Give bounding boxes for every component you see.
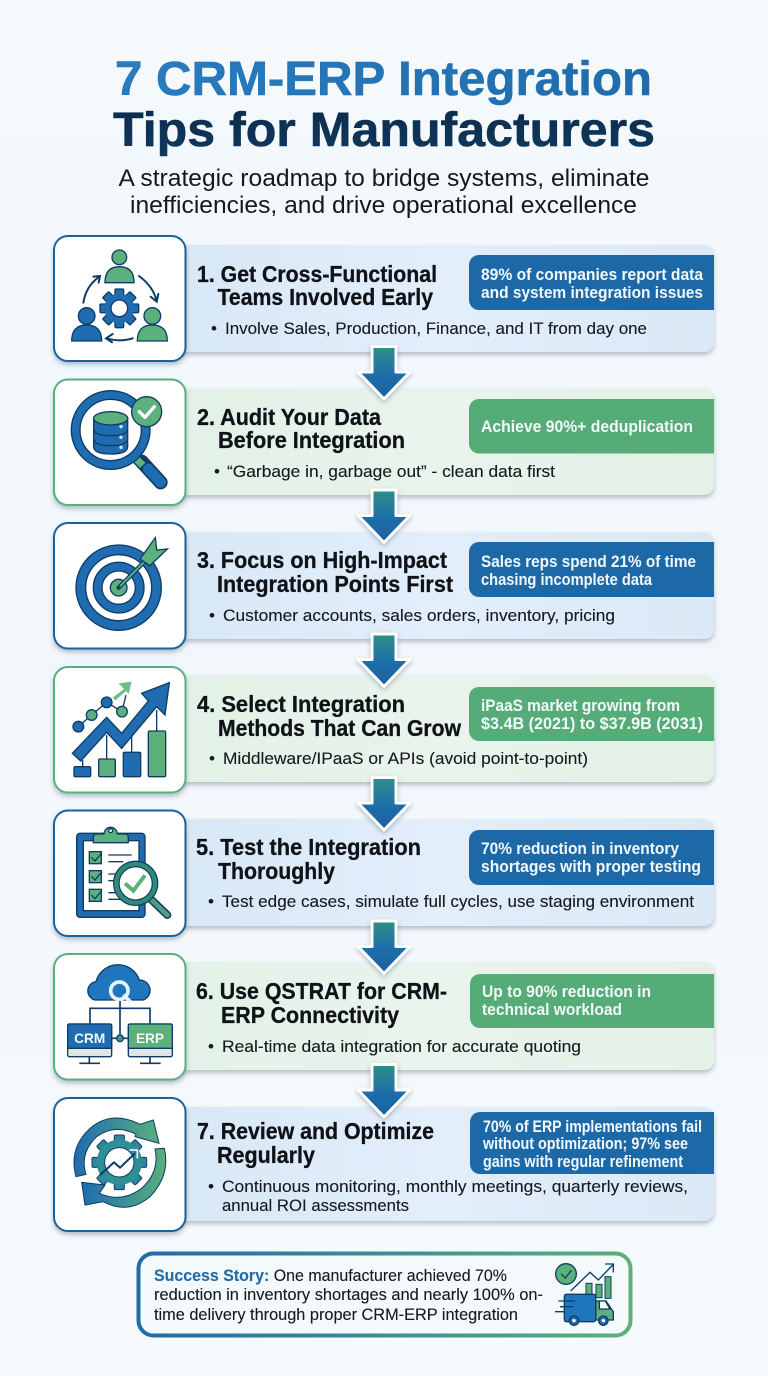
icon card: QSTRAT cloud with CRM and ERP: CRM bbox=[74, 1031, 105, 1046]
arrow 5 to 6 bbox=[358, 921, 410, 974]
bullet text: Middleware/IPaaS or APIs (avoid point-to-point) bbox=[223, 749, 588, 768]
heading: Before Integration bbox=[218, 427, 405, 453]
stat badge bbox=[469, 830, 714, 885]
stat badge bbox=[469, 399, 714, 454]
panel: tip 2 bbox=[54, 380, 714, 505]
heading: 3. Focus on High-Impact bbox=[197, 547, 447, 573]
stat badge: Achieve 90%+ deduplication bbox=[481, 418, 693, 436]
stat badge bbox=[469, 255, 714, 310]
title: Tips for Manufacturers bbox=[113, 104, 655, 157]
stat badge: technical workload bbox=[482, 1001, 622, 1019]
icon: delivery truck with growth chart bbox=[555, 1264, 613, 1325]
stat badge bbox=[470, 1112, 714, 1174]
heading: 7. Review and Optimize bbox=[197, 1118, 434, 1144]
heading bbox=[196, 834, 421, 884]
title bbox=[113, 53, 655, 157]
bullet text: • bbox=[208, 1177, 214, 1196]
heading: 1. Get Cross-Functional bbox=[197, 261, 437, 287]
heading bbox=[197, 261, 437, 310]
bullet text bbox=[208, 1177, 688, 1215]
arrow 3 to 4 bbox=[358, 634, 410, 686]
heading bbox=[197, 404, 405, 453]
stat badge bbox=[469, 542, 714, 597]
bullet text: • bbox=[208, 1037, 214, 1056]
arrow 2 to 3 bbox=[358, 490, 410, 542]
bullet text: Continuous monitoring, monthly meetings, quarterly reviews, bbox=[222, 1177, 688, 1196]
stat badge: Sales reps spend 21% of time bbox=[481, 553, 696, 571]
heading: Regularly bbox=[217, 1142, 315, 1168]
success story text: reduction in inventory shortages and nearly 100% on- bbox=[154, 1286, 543, 1304]
success story text bbox=[154, 1267, 543, 1324]
bullet text: • bbox=[208, 892, 214, 911]
stat badge: gains with regular refinement bbox=[483, 1153, 683, 1171]
heading: 2. Audit Your Data bbox=[197, 404, 381, 430]
arrow 1 to 2 bbox=[358, 346, 410, 399]
icon card: growth chart bbox=[54, 667, 186, 792]
panel: tip 6 bbox=[54, 954, 714, 1080]
heading: Integration Points First bbox=[217, 571, 453, 597]
heading: Methods That Can Grow bbox=[218, 715, 461, 741]
icon card: cross-functional teams bbox=[54, 236, 186, 361]
title: 7 CRM-ERP Integration bbox=[115, 53, 652, 106]
bullet text: Involve Sales, Production, Finance, and IT from day one bbox=[225, 319, 647, 338]
bullet text: annual ROI assessments bbox=[222, 1196, 409, 1215]
stat badge bbox=[470, 974, 714, 1028]
stat badge: $3.4B (2021) to $37.9B (2031) bbox=[481, 715, 703, 733]
stat badge: 70% reduction in inventory bbox=[481, 840, 680, 858]
heading bbox=[197, 547, 453, 597]
panel: tip 4 bbox=[54, 667, 714, 792]
panel: tip 5 bbox=[54, 810, 714, 936]
subtitle: A strategic roadmap to bridge systems, eliminate bbox=[118, 165, 650, 192]
callout: success story bbox=[138, 1254, 630, 1336]
panel: tip 7 bbox=[54, 1098, 714, 1231]
success story text: Success Story: One manufacturer achieved 70% bbox=[154, 1267, 507, 1285]
stat badge: 70% of ERP implementations fail bbox=[483, 1118, 702, 1136]
icon card: optimize cycle bbox=[54, 1098, 186, 1231]
arrow 4 to 5 bbox=[358, 778, 410, 830]
bullet text: Test edge cases, simulate full cycles, use staging environment bbox=[222, 892, 694, 911]
bullet text: Real-time data integration for accurate quoting bbox=[222, 1037, 581, 1056]
heading: 4. Select Integration bbox=[197, 691, 405, 717]
stat badge: Up to 90% reduction in bbox=[482, 983, 651, 1001]
heading: 5. Test the Integration bbox=[196, 834, 421, 860]
heading: Teams Involved Early bbox=[218, 284, 433, 310]
bullet text: • bbox=[211, 319, 217, 338]
stat badge: 89% of companies report data bbox=[481, 266, 704, 284]
subtitle: inefficiencies, and drive operational excellence bbox=[130, 192, 637, 219]
bullet text: “Garbage in, garbage out” - clean data first bbox=[227, 462, 555, 481]
panel: tip 3 bbox=[54, 523, 714, 648]
icon card: QSTRAT cloud with CRM and ERP: ERP bbox=[136, 1031, 164, 1046]
success story text: time delivery through proper CRM-ERP integration bbox=[154, 1306, 518, 1324]
subtitle bbox=[118, 165, 650, 219]
panel: tip 1 bbox=[54, 236, 714, 361]
bullet text: • bbox=[209, 606, 215, 625]
stat badge: without optimization; 97% see bbox=[482, 1135, 688, 1153]
icon card: target bbox=[54, 523, 186, 648]
stat badge: iPaaS market growing from bbox=[481, 697, 680, 715]
bullet text: • bbox=[214, 462, 220, 481]
arrow 6 to 7 bbox=[358, 1064, 410, 1117]
stat badge bbox=[469, 687, 714, 741]
stat badge: chasing incomplete data bbox=[481, 571, 653, 589]
heading bbox=[197, 1118, 434, 1168]
heading bbox=[196, 978, 447, 1028]
stat badge: and system integration issues bbox=[481, 284, 703, 302]
heading bbox=[197, 691, 461, 741]
icon card: QSTRAT cloud with CRM and ERP bbox=[54, 954, 186, 1080]
heading: ERP Connectivity bbox=[221, 1002, 399, 1028]
icon card: data audit magnifier bbox=[54, 380, 186, 505]
heading: 6. Use QSTRAT for CRM- bbox=[196, 978, 447, 1004]
heading: Thoroughly bbox=[218, 858, 335, 884]
stat badge: shortages with proper testing bbox=[481, 858, 701, 876]
bullet text: • bbox=[209, 749, 215, 768]
bullet text: Customer accounts, sales orders, inventory, pricing bbox=[223, 606, 615, 625]
icon card: testing clipboard bbox=[54, 810, 186, 936]
